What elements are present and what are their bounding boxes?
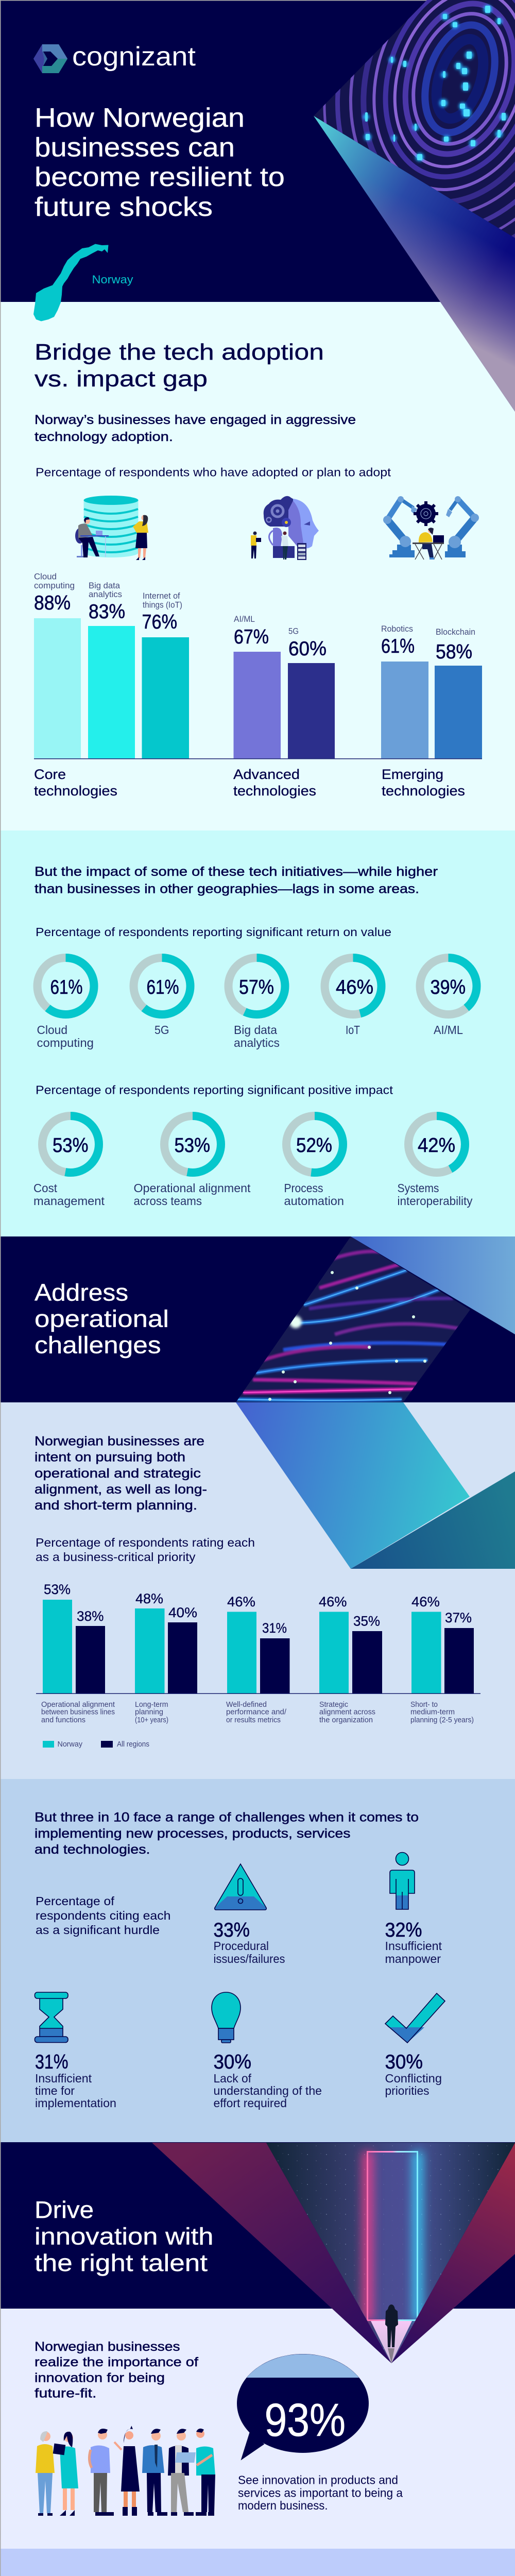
- hurdle: procedural issues with warning triangle icon: issues/failures: [213, 1952, 285, 1965]
- heading: Bridge the tech adoption vs. impact gap: [35, 340, 324, 392]
- bar value labels: 46%: [319, 1594, 347, 1609]
- hurdle: conflicting priorities with check mark icon: Conflicting: [385, 2072, 442, 2085]
- bar value and name labels: analytics: [89, 589, 122, 599]
- donut values and labels: return on value: 57%: [239, 976, 274, 998]
- bar value labels: 46%: [227, 1594, 255, 1609]
- lead text: importance of innovation: [35, 2340, 198, 2401]
- hurdle: insufficient manpower with person icon: manpower: [385, 1952, 441, 1965]
- bar value and name labels: [34, 572, 475, 663]
- bar value and name labels: 58%: [436, 641, 472, 663]
- lead text: operational and strategic alignment: operational and strategic: [35, 1466, 201, 1481]
- category labels: core, advanced, emerging: technologies: [382, 783, 465, 799]
- bar category labels: Operational alignment: [41, 1700, 115, 1709]
- title: businesses can: [35, 133, 235, 163]
- legend: Norway: [58, 1740, 82, 1749]
- title: become resilient to: [35, 162, 285, 192]
- Cognizant logo: [33, 42, 196, 73]
- hurdle: conflicting priorities with check mark icon: 30%: [385, 2051, 423, 2073]
- section heading: Address operational challenges: Address: [35, 1279, 128, 1306]
- lead text: aggressive adoption: [35, 413, 356, 444]
- lead text: operational and strategic alignment: and short-term planning.: [35, 1498, 197, 1513]
- hurdle: conflicting priorities with check mark icon: priorities: [385, 2084, 430, 2097]
- callout text: [238, 2473, 403, 2512]
- donut values and labels: return on value: 61%: [50, 976, 82, 998]
- illustration: AI head with gears and people: [251, 496, 319, 560]
- bar chart: adoption by technology group: [34, 572, 482, 759]
- hurdle: lack of understanding with light bulb icon: Lack of: [213, 2072, 252, 2085]
- chart caption: business-critical priority: [36, 1536, 255, 1564]
- hurdle: insufficient time with hourglass icon: [35, 1992, 116, 2110]
- bar value and name labels: Blockchain: [436, 627, 475, 637]
- title: future shocks: [35, 192, 213, 222]
- hurdle: insufficient manpower with person icon: 32%: [385, 1919, 422, 1941]
- title: How Norwegian: [35, 103, 245, 133]
- lead text: impact lags: than businesses in other geographies—lags in some areas.: [35, 882, 419, 896]
- lead text: impact lags: [35, 865, 438, 896]
- bar category labels: planning (2-5 years): [410, 1716, 474, 1724]
- donut values and labels: positive impact: interoperability: [398, 1194, 473, 1208]
- bar value and name labels: Internet of: [143, 591, 180, 601]
- bar category labels: planning: [135, 1707, 163, 1717]
- section heading: Drive innovation with the right talent: innovation with: [35, 2223, 213, 2249]
- bar value and name labels: 67%: [234, 626, 269, 648]
- donut values and labels: positive impact: 53%: [53, 1134, 89, 1157]
- hurdle: insufficient time with hourglass icon: 31%: [35, 2051, 68, 2073]
- donut values and labels: positive impact: across teams: [134, 1194, 202, 1208]
- chart caption: Percentage of respondents who have adopted or plan to adopt: [36, 466, 391, 479]
- hurdle: insufficient time with hourglass icon: Insufficient: [35, 2072, 92, 2085]
- caption: significant hurdle: as a significant hurdle: [36, 1923, 160, 1937]
- category labels: core, advanced, emerging: [34, 767, 465, 799]
- caption: significant hurdle: Percentage of: [36, 1894, 115, 1908]
- title: [35, 103, 285, 222]
- section prism: gradient shapes: [236, 1236, 515, 1569]
- illustration: database cylinder with two people: [75, 496, 148, 560]
- label: Norway: Norway: [92, 273, 133, 286]
- bar value and name labels: 76%: [142, 611, 177, 633]
- category labels: core, advanced, emerging: Advanced: [233, 767, 300, 782]
- donut values and labels: return on value: 5G: [154, 1023, 169, 1037]
- chart caption: business-critical priority: as a business-critical priority: [36, 1550, 196, 1564]
- lead text: importance of innovation: future-fit.: [35, 2386, 97, 2401]
- section prism: magenta wedges: [152, 2143, 515, 2363]
- lead text: importance of innovation: realize the importance of: [35, 2355, 198, 2369]
- bar category labels: alignment across: [319, 1707, 375, 1717]
- illustration: robot arms and gear: [383, 496, 479, 560]
- donut values and labels: return on value: computing: [37, 1036, 94, 1049]
- category labels: core, advanced, emerging: Core: [34, 767, 66, 782]
- bar value labels: 37%: [445, 1610, 472, 1625]
- bar value and name labels: Robotics: [381, 624, 413, 634]
- bar category labels: or results metrics: [226, 1716, 281, 1724]
- bar value and name labels: computing: [34, 581, 75, 590]
- bar category labels: Strategic: [319, 1700, 348, 1709]
- donut values and labels: positive impact: Process: [284, 1181, 323, 1195]
- lead text: impact lags: But the impact of some of these tech initiatives—while higher: [35, 865, 438, 879]
- bar category labels: and functions: [41, 1716, 85, 1724]
- bar value and name labels: 5G: [288, 626, 299, 636]
- bar value and name labels: AI/ML: [234, 614, 255, 624]
- legend: All regions: [117, 1740, 149, 1749]
- lead text: three in 10 face challenges: But three in 10 face a range of challenges when it comes to: [35, 1810, 419, 1825]
- donut values and labels: return on value: [37, 976, 466, 1049]
- bar category labels: the organization: [319, 1716, 373, 1724]
- legend: [43, 1740, 149, 1749]
- callout text: See innovation in products and: [238, 2473, 398, 2486]
- donut values and labels: return on value: 46%: [336, 976, 373, 998]
- section heading: Drive innovation with the right talent: Drive: [35, 2196, 94, 2223]
- donut values and labels: positive impact: [33, 1134, 473, 1208]
- donut values and labels: positive impact: 53%: [174, 1134, 210, 1157]
- donut charts: return on value: [37, 958, 477, 1014]
- lead text: operational and strategic alignment: Norwegian businesses are: [35, 1434, 204, 1449]
- bar category labels: between business lines: [41, 1707, 115, 1717]
- lead text: importance of innovation: Norwegian businesses: [35, 2340, 180, 2354]
- hurdle: insufficient time with hourglass icon: time for: [35, 2084, 75, 2097]
- heading: Bridge the tech adoption vs. impact gap: vs. impact gap: [35, 366, 208, 392]
- hurdle: insufficient manpower with person icon: Insufficient: [385, 1939, 442, 1953]
- donut values and labels: positive impact: automation: [284, 1194, 344, 1208]
- bar category labels: medium-term: [410, 1707, 455, 1717]
- category labels: core, advanced, emerging: technologies: [34, 783, 117, 799]
- lead text: three in 10 face challenges: and technologies.: [35, 1842, 150, 1857]
- donut values and labels: return on value: 39%: [431, 976, 466, 998]
- lead text: three in 10 face challenges: [35, 1810, 419, 1857]
- bar category labels: (10+ years): [135, 1716, 168, 1724]
- chart caption: return on value: Percentage of respondents reporting significant return on value: [36, 925, 391, 939]
- donut values and labels: return on value: IoT: [346, 1023, 360, 1037]
- bar category labels: Well-defined: [226, 1700, 267, 1709]
- hurdle: insufficient time with hourglass icon: implementation: [35, 2096, 116, 2110]
- hurdle: procedural issues with warning triangle icon: [213, 1864, 285, 1965]
- bar category labels: [41, 1700, 474, 1724]
- lead text: aggressive adoption: Norway’s businesses have engaged in aggressive: [35, 413, 356, 427]
- category labels: core, advanced, emerging: technologies: [233, 783, 316, 799]
- callout: 93% speech bubble: [237, 2354, 369, 2461]
- hero image: glowing swirl of cables: [314, 0, 515, 238]
- bar value and name labels: 61%: [381, 635, 415, 657]
- chart caption: positive impact: Percentage of respondents reporting significant positive impact: [36, 1083, 393, 1096]
- lead text: operational and strategic alignment: alignment, as well as long-: [35, 1482, 207, 1497]
- lead text: operational and strategic alignment: [35, 1434, 207, 1513]
- bar category labels: Long-term: [135, 1700, 168, 1709]
- bar value and name labels: 60%: [288, 638, 327, 660]
- map of Norway: [33, 244, 133, 321]
- donut values and labels: return on value: 61%: [146, 976, 179, 998]
- chart caption: business-critical priority: Percentage of respondents rating each: [36, 1536, 255, 1549]
- hurdle: insufficient manpower with person icon: [385, 1853, 442, 1965]
- bar value labels: 35%: [353, 1614, 380, 1629]
- section heading: Address operational challenges: challenges: [35, 1331, 161, 1358]
- section heading: Address operational challenges: [35, 1279, 169, 1358]
- lead text: aggressive adoption: technology adoption.: [35, 430, 173, 444]
- hurdle: lack of understanding with light bulb icon: [212, 1992, 322, 2110]
- section heading: Address operational challenges: operational: [35, 1306, 169, 1332]
- heading: Bridge the tech adoption vs. impact gap: Bridge the tech adoption: [35, 340, 324, 365]
- donut values and labels: positive impact: 42%: [418, 1134, 455, 1157]
- section heading: Drive innovation with the right talent: the right talent: [35, 2249, 208, 2276]
- caption: significant hurdle: respondents citing each: [36, 1909, 171, 1922]
- donut values and labels: positive impact: Operational alignment: [134, 1181, 251, 1195]
- lead text: importance of innovation: innovation for being: [35, 2371, 165, 2385]
- bar value labels: 53%: [44, 1582, 71, 1597]
- illustration: group of seven professionals: [36, 2426, 215, 2516]
- donut values and labels: return on value: Big data: [234, 1023, 277, 1037]
- lead text: three in 10 face challenges: implementing new processes, products, services: [35, 1826, 350, 1841]
- donut values and labels: return on value: Cloud: [37, 1023, 67, 1037]
- donut values and labels: positive impact: management: [33, 1194, 105, 1208]
- donut values and labels: return on value: analytics: [234, 1036, 280, 1049]
- callout text: services as important to being a: [238, 2486, 403, 2500]
- bar value labels: 40%: [168, 1605, 197, 1620]
- bar category labels: performance and/: [226, 1707, 287, 1717]
- category labels: core, advanced, emerging: Emerging: [382, 767, 443, 782]
- caption: significant hurdle: [36, 1894, 171, 1937]
- bar value labels: 31%: [262, 1620, 287, 1636]
- hurdle: lack of understanding with light bulb icon: understanding of the: [213, 2084, 322, 2097]
- bar value labels: 48%: [135, 1591, 163, 1606]
- section image: neon doorway under starry sky: [258, 2143, 515, 2364]
- hurdle: lack of understanding with light bulb icon: 30%: [213, 2051, 251, 2073]
- logo wordmark: cognizant: [72, 42, 196, 72]
- hurdle: lack of understanding with light bulb icon: effort required: [213, 2096, 287, 2110]
- grouped bar chart: Norway vs all regions: [36, 1582, 480, 1749]
- bar category labels: Short- to: [410, 1700, 438, 1709]
- hurdle: procedural issues with warning triangle icon: Procedural: [213, 1939, 269, 1953]
- bar value labels: [44, 1582, 472, 1636]
- hurdle: conflicting priorities with check mark icon: [385, 1993, 445, 2097]
- bar value labels: 38%: [77, 1608, 104, 1624]
- bar value and name labels: things (IoT): [143, 600, 182, 610]
- bar value labels: 46%: [411, 1594, 440, 1609]
- bar value and name labels: 83%: [89, 601, 125, 623]
- hurdle: procedural issues with warning triangle icon: 33%: [213, 1919, 250, 1941]
- donut values and labels: positive impact: 52%: [296, 1134, 332, 1157]
- hero gradient prism: [314, 116, 515, 412]
- section image: light streams: [232, 1236, 474, 1404]
- section heading: Drive innovation with the right talent: [35, 2196, 213, 2276]
- donut values and labels: positive impact: Systems: [398, 1181, 439, 1195]
- donut values and labels: return on value: AI/ML: [434, 1023, 463, 1037]
- callout: 93% speech bubble: 93%: [265, 2395, 346, 2446]
- lead text: operational and strategic alignment: intent on pursuing both: [35, 1450, 185, 1464]
- bar value and name labels: Big data: [89, 581, 121, 590]
- donut charts: positive impact: [42, 1116, 465, 1173]
- bar value and name labels: 88%: [34, 592, 71, 614]
- donut values and labels: positive impact: Cost: [33, 1181, 58, 1195]
- callout text: modern business.: [238, 2499, 328, 2512]
- bar value and name labels: Cloud: [34, 572, 57, 581]
